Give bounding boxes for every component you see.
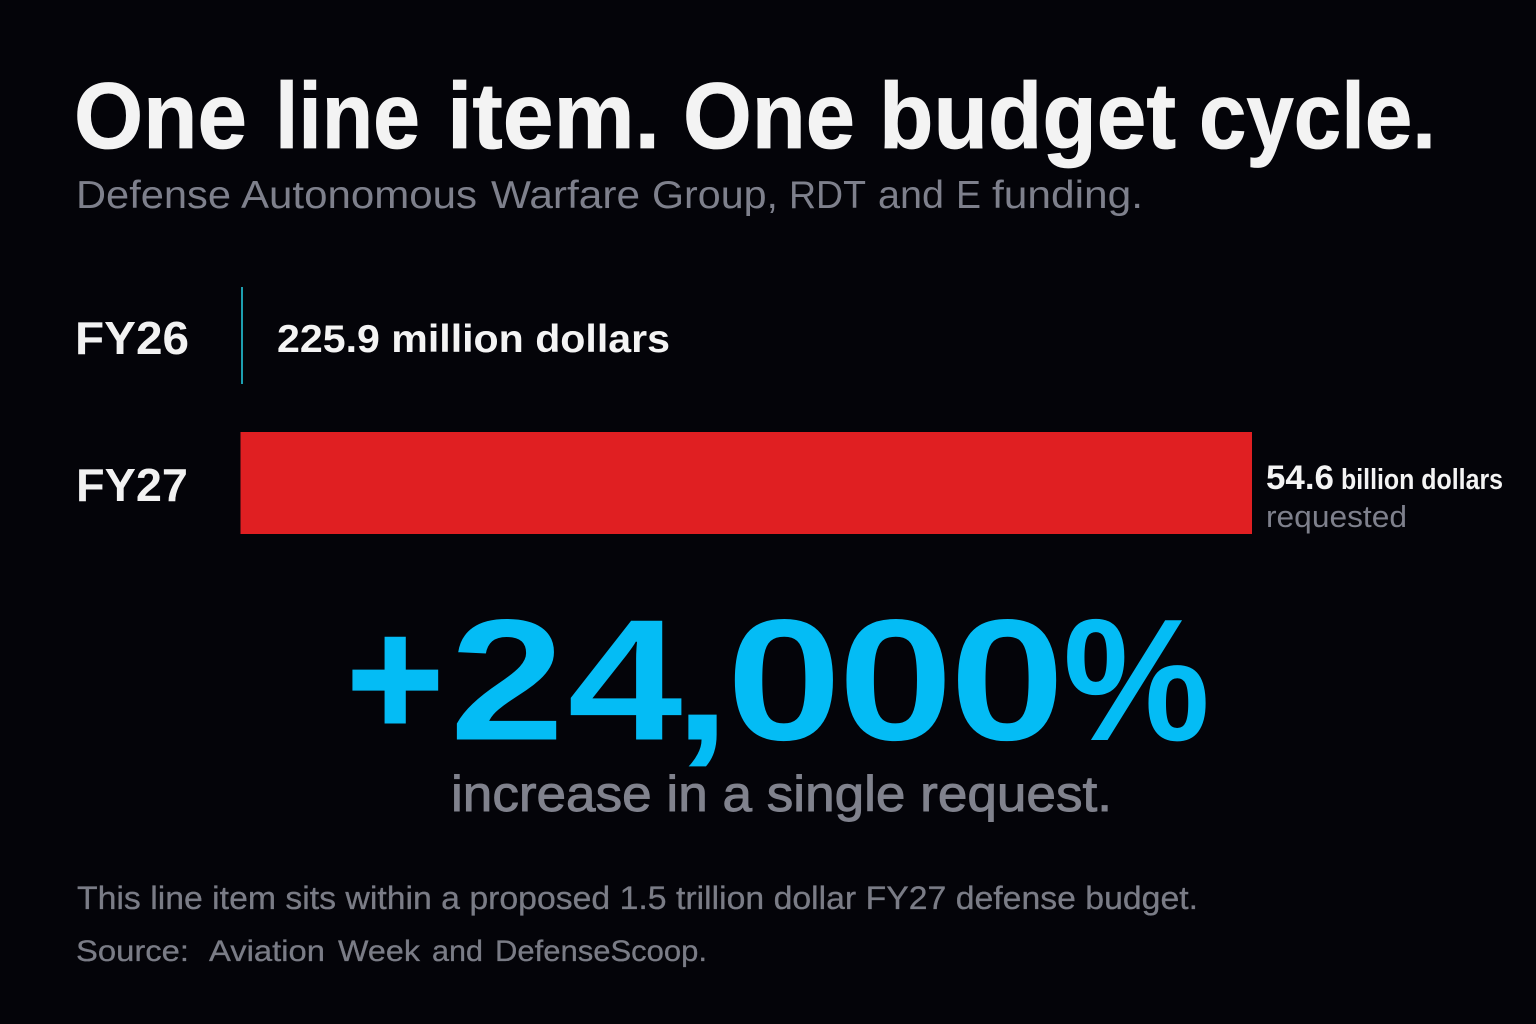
FY27 bar: [240, 432, 1252, 534]
title: [74, 63, 1436, 168]
source: and: [432, 935, 483, 968]
source: Week: [338, 935, 421, 968]
FY27 requested note: requested: [1266, 499, 1407, 534]
title: One: [74, 63, 247, 168]
source: Aviation: [209, 935, 325, 968]
FY27 value: 54.6: [1266, 459, 1334, 497]
FY27 value: billion dollars: [1341, 464, 1503, 496]
subtitle: E: [956, 174, 981, 217]
FY27 label: FY27: [76, 459, 188, 511]
stat caption: increase in a single request.: [451, 766, 1112, 822]
source: [76, 935, 707, 968]
source: Source:: [76, 935, 189, 968]
subtitle: and: [878, 174, 944, 217]
title: item.: [447, 63, 660, 168]
context note: This line item sits within a proposed 1.5 trillion dollar FY27 defense budget.: [77, 880, 1198, 916]
subtitle: Warfare: [491, 174, 640, 217]
big stat: 24,000: [449, 582, 1065, 777]
subtitle: funding.: [992, 174, 1143, 217]
FY26 bar: thin sliver: [241, 287, 243, 384]
FY27 value: [1266, 459, 1503, 497]
row: FY26: [75, 287, 670, 384]
big stat: +: [347, 586, 443, 770]
FY26 label: FY26: [75, 312, 189, 364]
title: cycle.: [1199, 63, 1436, 168]
source: DefenseScoop.: [495, 935, 707, 968]
subtitle: Defense: [76, 174, 231, 217]
title: One: [683, 63, 855, 168]
big stat: %: [1063, 582, 1210, 777]
subtitle: [76, 174, 1143, 217]
title: line: [275, 63, 420, 168]
FY26 value: 225.9 million dollars: [277, 318, 670, 361]
title: budget: [879, 63, 1176, 168]
subtitle: Autonomous: [241, 174, 477, 217]
subtitle: Group,: [652, 174, 778, 217]
row: FY27: [76, 432, 1503, 534]
subtitle: RDT: [789, 174, 866, 217]
